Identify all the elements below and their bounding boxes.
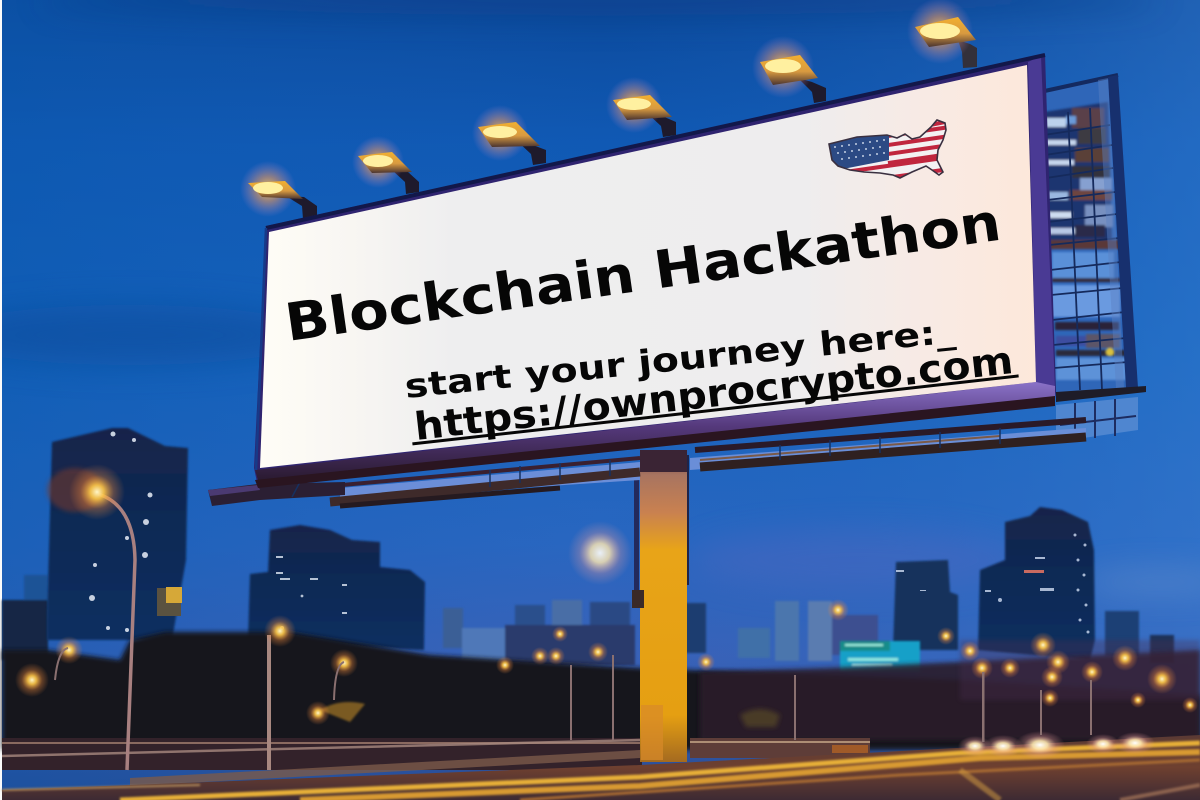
url link: https://ownprocrypto.com bbox=[412, 338, 1015, 449]
cyan illuminated sign bbox=[840, 641, 920, 680]
road with light trails bbox=[2, 735, 1200, 800]
billboard panel bbox=[260, 65, 1036, 468]
floodlight 3 bbox=[472, 105, 546, 165]
lamp: floodlights row bbox=[240, 0, 977, 219]
floodlight 1 bbox=[240, 161, 317, 219]
distant city lights bbox=[15, 599, 1198, 725]
call to action text: start your journey here:_ bbox=[403, 311, 958, 406]
street lamp: mid bbox=[264, 615, 296, 770]
floodlight 5 bbox=[752, 36, 826, 103]
billboard frame bbox=[254, 54, 1056, 488]
floodlight 4 bbox=[606, 77, 676, 137]
highway guardrail bbox=[2, 738, 870, 786]
building: tall left tower bbox=[47, 428, 188, 640]
distant skyline bbox=[2, 575, 1174, 668]
icon: USA flag map bbox=[828, 119, 947, 179]
title: Blockchain Hackathon bbox=[281, 193, 1005, 354]
floodlight 6 bbox=[907, 0, 977, 68]
lower truss and catwalk bbox=[208, 386, 1146, 506]
right service scaffold bbox=[1040, 75, 1138, 396]
glowing lamp behind pole bbox=[568, 521, 632, 585]
dark tree line bbox=[2, 632, 1200, 750]
building: central left cluster bbox=[248, 525, 425, 650]
support pole bbox=[632, 450, 689, 762]
street lamp: left large bbox=[69, 464, 135, 770]
building: right tower group bbox=[893, 507, 1095, 660]
street lamps: distant posts bbox=[55, 648, 1092, 742]
floodlight 2 bbox=[352, 136, 419, 194]
car headlights bbox=[958, 731, 1155, 759]
